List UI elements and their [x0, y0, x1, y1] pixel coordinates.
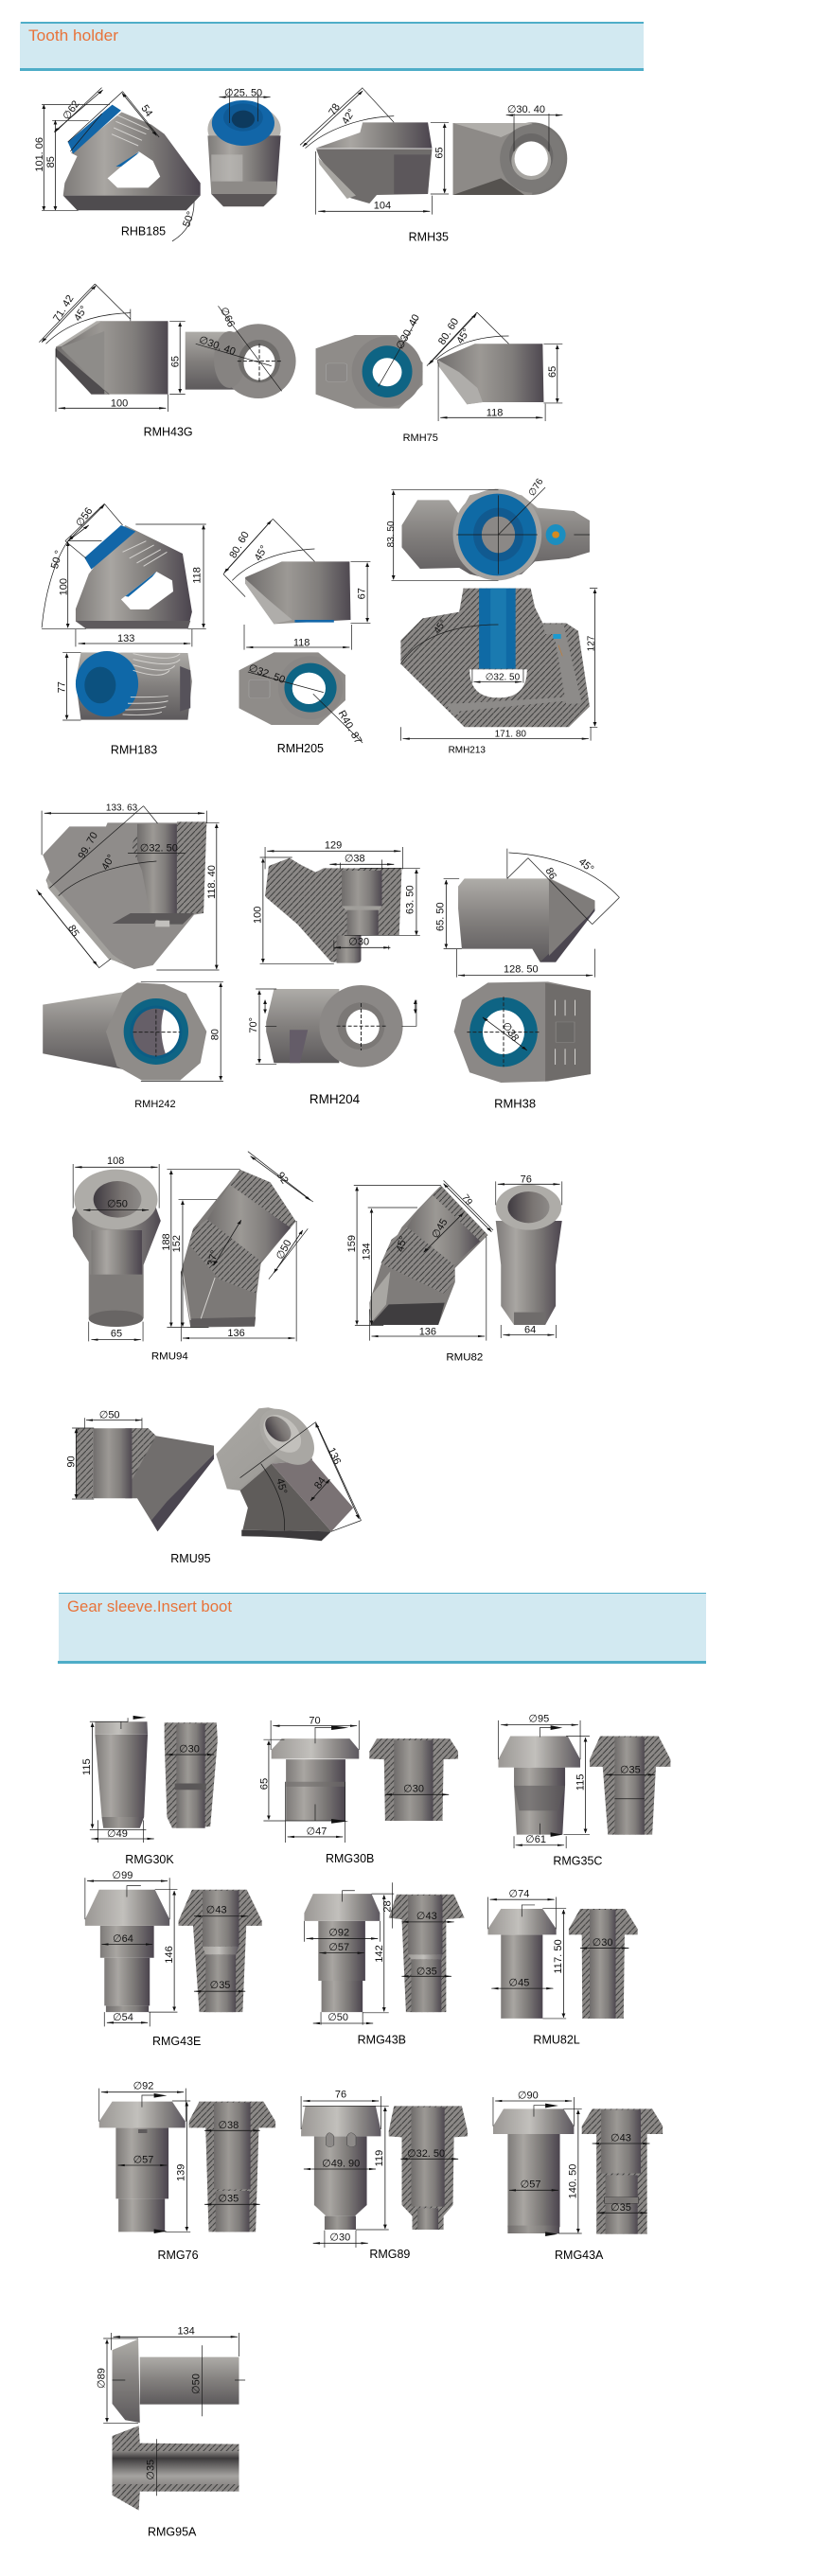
- label: RMU82: RMU82: [446, 1351, 483, 1363]
- label: RMU94: RMU94: [151, 1351, 188, 1363]
- label: RMG76: RMG76: [157, 2249, 199, 2262]
- section: gear sleeves rows 1 and 2: [81, 1714, 670, 2048]
- label: RMU82L: RMU82L: [533, 2033, 580, 2046]
- label: RMG35C: RMG35C: [553, 1855, 602, 1868]
- section: tooth holders row 5 and 6: [65, 1152, 562, 1565]
- product: RMU82: 136: [419, 1327, 436, 1338]
- label: RMU95: RMU95: [170, 1552, 211, 1565]
- product: RMH205: 45°: [253, 543, 270, 563]
- product: RMH205: 80. 60: [227, 530, 252, 560]
- product: RMH213: 83. 50: [386, 520, 397, 547]
- product: RMH75: 65: [547, 366, 558, 378]
- product: RMH38: 45°: [576, 856, 595, 875]
- product: RMH75: 118: [487, 407, 503, 418]
- product: RMH35: [300, 88, 567, 243]
- product: RMH183: [42, 503, 206, 757]
- product: RMG89: 76: [335, 2090, 346, 2101]
- product: RMG30K: ∅49: [107, 1828, 128, 1840]
- product: RMH43G: 71. 42: [51, 293, 76, 324]
- product: RMH213: ∅32. 50: [486, 672, 521, 682]
- product: RMU82: ∅45: [430, 1217, 450, 1241]
- product: RMG30K: 115: [81, 1758, 93, 1775]
- product: RMH213: [386, 477, 597, 756]
- product: RMG43B: ∅50: [327, 2012, 348, 2023]
- product: RMH38: 86: [543, 866, 558, 881]
- product: RMU94: 92: [274, 1171, 291, 1186]
- product: RMG89: [301, 2090, 468, 2261]
- product: RMG35C: ∅95: [528, 1714, 549, 1725]
- product: RMU94: 108: [107, 1156, 124, 1167]
- product: RMH204: 100: [253, 907, 264, 924]
- product: RMH242: 80: [209, 1029, 221, 1040]
- product: RMG95A: ∅89: [96, 2368, 107, 2389]
- product: RMH183: 133: [117, 633, 134, 644]
- product: RMG95A: 134: [177, 2326, 195, 2338]
- product: RMG95A: ∅50: [191, 2373, 203, 2394]
- product: RMH205: 67: [356, 588, 367, 599]
- product: RMG43B: 28: [381, 1900, 393, 1913]
- product: RMU95: 90: [65, 1456, 77, 1468]
- product: RMU82: 79: [459, 1192, 474, 1208]
- label: RMH75: RMH75: [403, 432, 438, 444]
- product: RMG43E: ∅35: [210, 1980, 230, 1991]
- product: RMH205: 118: [293, 637, 310, 648]
- product: RMG89: 119: [374, 2150, 385, 2166]
- product: RMU82L: ∅74: [509, 1888, 529, 1900]
- product: RMG43A: 140. 50: [568, 2164, 579, 2198]
- product: RMH242: 85: [65, 923, 81, 939]
- product: RMH43G: 45°: [72, 304, 90, 324]
- product: RMH43G: ∅66: [218, 306, 237, 329]
- label: RMH213: RMH213: [449, 746, 486, 756]
- product: RMH205: ∅32. 50: [247, 662, 287, 686]
- product: RMH205: R40. 87: [336, 709, 363, 746]
- label: RMH205: RMH205: [277, 742, 324, 755]
- section: tooth holders row 4: [37, 803, 619, 1111]
- product: RMG95A: ∅35: [146, 2460, 157, 2480]
- product: RHB185: 85: [45, 156, 57, 168]
- product: RHB185: [34, 88, 281, 241]
- product: RMH43G: [39, 284, 296, 439]
- section: tooth holders row 1 and 2: [34, 88, 567, 444]
- product: RMU82L: [487, 1888, 638, 2046]
- product: RMH183: 50 °: [49, 549, 65, 570]
- product: RMH204: 129: [325, 840, 342, 852]
- product: RMH75: 45°: [454, 326, 472, 346]
- product: RMH242: [37, 803, 223, 1110]
- label: RMH242: RMH242: [134, 1099, 176, 1110]
- product: RMG43B: ∅92: [328, 1928, 349, 1939]
- label: RMG89: RMG89: [369, 2248, 410, 2261]
- product: RMG30K: [81, 1716, 218, 1866]
- product: RMU94: 37°: [205, 1249, 221, 1267]
- product: RMH204: 70°: [248, 1017, 259, 1033]
- product: RMU94: 136: [227, 1328, 245, 1339]
- product: RMH38: [435, 849, 619, 1111]
- product: RMH204: ∅38: [345, 854, 365, 865]
- label: RMH43G: RMH43G: [144, 426, 193, 439]
- product: RMG35C: ∅61: [525, 1834, 546, 1845]
- product: RMH213: 45°: [433, 618, 449, 636]
- product: RMU95: 84: [312, 1475, 328, 1491]
- product: RMH43G: 65: [170, 356, 182, 367]
- section: gear sleeves rows 3 and 4: [96, 2080, 663, 2538]
- product: RMH43G: 100: [111, 397, 128, 409]
- product: RMU95: [65, 1404, 361, 1565]
- product: RMG76: ∅38: [218, 2120, 239, 2131]
- product: RMH38: 65. 50: [435, 902, 447, 931]
- product: RMU94: 188: [161, 1233, 172, 1251]
- product: RMG43E: ∅43: [206, 1905, 227, 1916]
- product: RMG89: ∅49. 90: [322, 2158, 360, 2169]
- product: RMG30B: ∅47: [307, 1826, 327, 1838]
- product: RMH242: 40°: [99, 853, 117, 872]
- product: RMG43E: ∅54: [113, 2012, 133, 2023]
- product: RMH205: [223, 519, 370, 755]
- product: RMH204: 63. 50: [405, 885, 416, 914]
- product: RMG43A: ∅43: [610, 2132, 631, 2144]
- product: RMU82: 159: [346, 1235, 358, 1252]
- product: RMU94: ∅50: [107, 1199, 128, 1210]
- product: RMH183: ∅56: [74, 505, 95, 529]
- product: RHB185: 50°: [181, 210, 197, 229]
- product: RMH183: 118: [192, 567, 204, 584]
- product: RMH242: 99. 70: [76, 830, 100, 861]
- product: RMG43B: [304, 1882, 465, 2046]
- product: RMU82L: ∅45: [509, 1977, 529, 1988]
- product: RMG76: 139: [176, 2164, 187, 2181]
- panel: tooth holder heading: [20, 22, 644, 71]
- label: RMG43B: RMG43B: [358, 2033, 406, 2046]
- product: RMH38: 128. 50: [504, 964, 539, 976]
- product: RMU94: [72, 1152, 313, 1363]
- label: RMG95A: RMG95A: [148, 2525, 197, 2538]
- product: RMU82L: ∅30: [593, 1937, 613, 1949]
- product: RMG95A: [96, 2326, 245, 2538]
- label: RMH38: RMH38: [494, 1097, 536, 1111]
- product: RMH75: 80. 60: [436, 316, 461, 347]
- product: RMG43E: ∅64: [113, 1933, 133, 1945]
- product: RMG89: ∅32. 50: [407, 2148, 445, 2160]
- product: RMG43B: ∅35: [416, 1966, 437, 1977]
- product: RHB185: 54: [138, 103, 154, 119]
- product: RMU82: 64: [524, 1324, 536, 1335]
- label: RMH204: RMH204: [310, 1092, 361, 1106]
- product: RMG43E: [85, 1870, 262, 2048]
- product: RMG35C: 115: [575, 1774, 586, 1791]
- product: RMH242: 133. 63: [106, 803, 138, 814]
- product: RMG43B: 142: [374, 1945, 385, 1963]
- label: RMG43A: RMG43A: [555, 2249, 604, 2262]
- product: RMU94: 65: [111, 1329, 122, 1340]
- product: RMU94: 152: [171, 1235, 183, 1252]
- product: RMU82: [346, 1173, 562, 1363]
- label: RMG43E: RMG43E: [152, 2035, 201, 2048]
- product: RMH213: 127: [586, 635, 596, 651]
- product: RMH242: ∅32. 50: [140, 842, 178, 854]
- product: RMH75: ∅30. 40: [395, 312, 422, 351]
- product: RMU94: ∅50: [274, 1238, 294, 1262]
- product: RHB185: 101. 06: [34, 137, 45, 172]
- product: RMU82: 76: [521, 1173, 532, 1185]
- product: RMH38: ∅38: [500, 1020, 521, 1044]
- product: RMU82: 134: [361, 1243, 372, 1261]
- product: RMH35: 104: [374, 201, 391, 212]
- product: RMH35: 42°: [340, 107, 358, 127]
- product: RMG43E: ∅99: [113, 1870, 133, 1881]
- product: RHB185: ∅25. 50: [224, 88, 262, 99]
- product: RMG76: ∅92: [133, 2080, 153, 2091]
- product: RMG30K: ∅30: [179, 1744, 200, 1756]
- product: RMG43E: 146: [164, 1946, 175, 1964]
- product: RMG43A: ∅57: [521, 2179, 540, 2191]
- product: RMG30B: 65: [258, 1778, 270, 1790]
- product: RMU82L: 117. 50: [553, 1939, 564, 1974]
- product: RMH183: 100: [59, 578, 70, 595]
- product: RMH242: 118. 40: [206, 865, 218, 899]
- label: RMH35: RMH35: [409, 230, 449, 243]
- label: RMG30K: RMG30K: [125, 1853, 174, 1866]
- product: RMG43A: ∅35: [610, 2202, 631, 2214]
- product: RMG30B: [258, 1715, 458, 1865]
- heading: Gear sleeve.Insert boot: Gear sleeve.Insert boot: [67, 1597, 232, 1615]
- product: RMG76: ∅57: [133, 2154, 153, 2165]
- product: RMH183: 77: [56, 681, 67, 693]
- product: RMH35: ∅30. 40: [507, 104, 545, 115]
- heading: Tooth holder: Tooth holder: [28, 26, 118, 44]
- product: RMU95: 45°: [274, 1477, 289, 1495]
- label: RMH183: RMH183: [111, 744, 157, 757]
- product: RMG76: ∅35: [218, 2194, 239, 2205]
- product: RMG43B: ∅57: [328, 1942, 349, 1953]
- product: RMG76: [99, 2080, 275, 2262]
- product: RMG30B: 70: [309, 1715, 321, 1726]
- product: RMH204: [248, 840, 420, 1106]
- product: RMH204: ∅30: [348, 936, 369, 947]
- product: RMH213: ∅76: [527, 477, 546, 499]
- product: RMU95: ∅50: [99, 1409, 120, 1420]
- product: RMG43A: [493, 2090, 663, 2262]
- product: RMG35C: [498, 1714, 670, 1868]
- product: RMG89: ∅30: [329, 2232, 350, 2244]
- panel: gear sleeve heading: [58, 1593, 706, 1664]
- product: RMH35: 65: [434, 147, 446, 159]
- product: RMG43B: ∅43: [416, 1911, 437, 1922]
- product: RMG35C: ∅35: [620, 1764, 641, 1775]
- product: RMG30B: ∅30: [403, 1784, 424, 1795]
- label: RMG30B: RMG30B: [326, 1852, 374, 1865]
- product: RHB185: ∅62: [61, 98, 82, 122]
- product: RMU95: 136: [325, 1446, 343, 1467]
- product: RMH43G: ∅30. 40: [197, 334, 237, 358]
- product: RMU82: 45°: [395, 1235, 410, 1253]
- product: RMG43A: ∅90: [518, 2090, 539, 2101]
- product: RMH35: 78: [327, 102, 343, 117]
- label: RHB185: RHB185: [121, 225, 166, 238]
- product: RMH75: [316, 312, 562, 444]
- section: tooth holders row 3: [42, 477, 597, 757]
- product: RMH213: 171. 80: [495, 729, 526, 739]
